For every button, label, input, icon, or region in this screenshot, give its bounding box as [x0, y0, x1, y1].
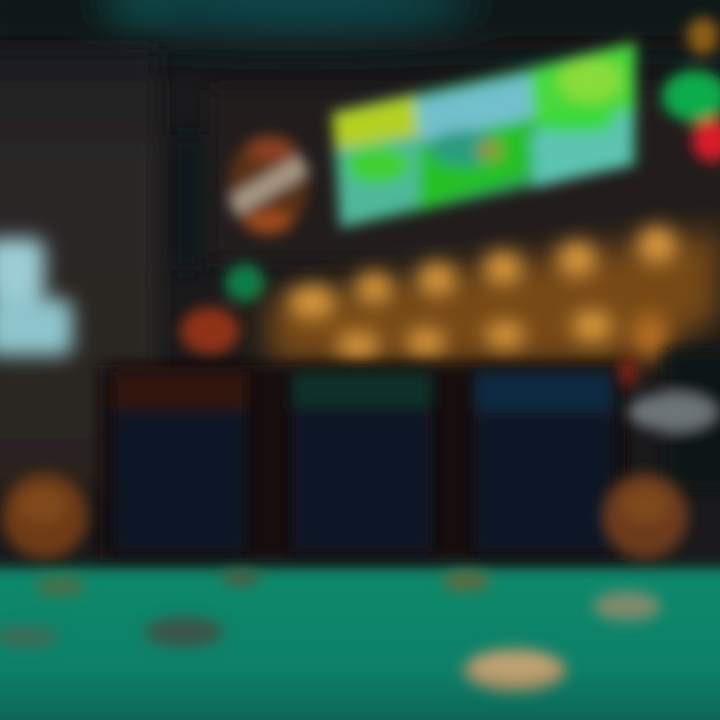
left basketball: [2, 473, 88, 559]
right cabinet: [474, 372, 614, 552]
ceiling glow: [0, 0, 720, 50]
green table surface: [0, 568, 720, 720]
green and red wall lights: [180, 264, 265, 355]
chips on table: [0, 570, 661, 692]
cabinet frame: [100, 365, 625, 560]
right wall signs: [662, 17, 720, 162]
row of warm lights: [288, 226, 677, 359]
middle cabinet: [292, 372, 432, 552]
round team logo: [228, 135, 310, 235]
left white window glow: [0, 238, 73, 356]
left wall panel: [0, 50, 720, 490]
right basketball: [602, 473, 688, 559]
right side equipment: [619, 350, 720, 490]
bar counter glow: [265, 230, 720, 365]
wall screen: [332, 42, 636, 228]
left cabinet: [114, 372, 246, 552]
